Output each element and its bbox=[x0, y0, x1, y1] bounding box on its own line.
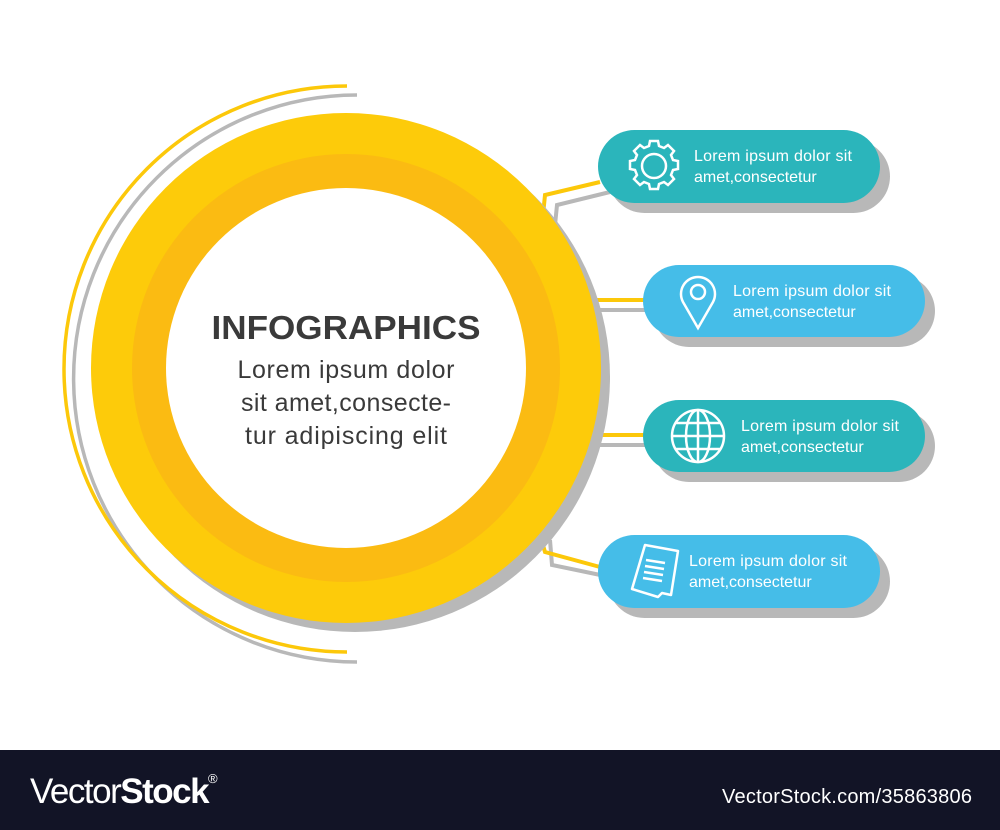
center text: sit amet,consecte- bbox=[241, 389, 451, 417]
pill 3: amet,consectetur bbox=[741, 439, 864, 456]
pill 4: Lorem ipsum dolor sit bbox=[689, 553, 848, 570]
center text: Lorem ipsum dolor bbox=[238, 356, 454, 384]
footer: VectorStock.com/35863806 bbox=[722, 786, 972, 808]
icon: map pin bbox=[681, 277, 715, 328]
pill 1: amet,consectetur bbox=[694, 169, 817, 186]
icon: globe bbox=[672, 410, 724, 462]
pill 2 bbox=[643, 265, 935, 347]
decorative arcs bbox=[64, 86, 357, 662]
footer bbox=[0, 750, 1000, 830]
main circle bbox=[91, 113, 610, 632]
pill 2: amet,consectetur bbox=[733, 304, 856, 321]
footer: ® bbox=[208, 771, 218, 786]
connectors bbox=[538, 182, 650, 577]
pill 1 bbox=[598, 130, 890, 213]
pill 2: Lorem ipsum dolor sit bbox=[733, 283, 892, 300]
pill 3: Lorem ipsum dolor sit bbox=[741, 418, 900, 435]
pill 1: Lorem ipsum dolor sit bbox=[694, 148, 853, 165]
title: INFOGRAPHICS bbox=[212, 309, 480, 346]
footer: VectorStock bbox=[30, 772, 208, 811]
pill 4: amet,consectetur bbox=[689, 574, 812, 591]
icon: document bbox=[632, 545, 678, 597]
center text bbox=[238, 356, 454, 450]
pill 4 bbox=[598, 535, 890, 618]
pill 3 bbox=[643, 400, 935, 482]
icon: gear bbox=[630, 141, 678, 189]
center text: tur adipiscing elit bbox=[245, 422, 447, 450]
